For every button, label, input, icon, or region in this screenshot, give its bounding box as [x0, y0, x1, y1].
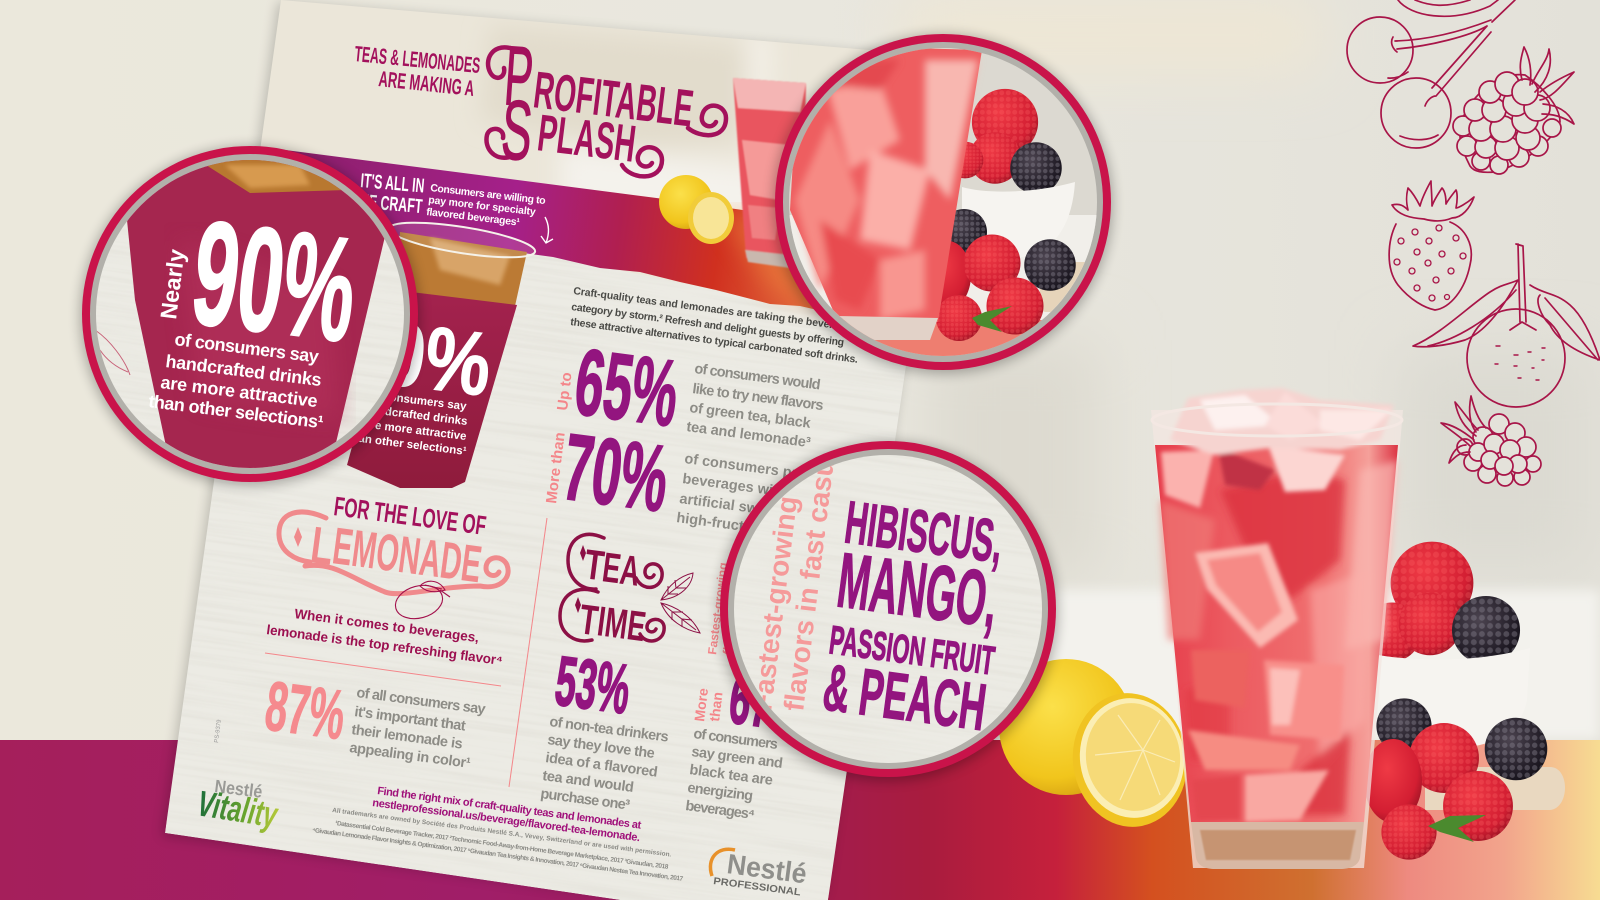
- title: Profitable Splash: [486, 28, 726, 178]
- icon: raspberry: [1453, 47, 1574, 174]
- band text: pay more for specialty: [428, 194, 536, 218]
- magnified flavour list: HIBISCUS,: [841, 488, 1007, 576]
- heading: For the love of lemonade: EMONADE: [329, 517, 485, 594]
- stat: 67%: than: [706, 691, 726, 722]
- stat: 70%: artificial sweeteners or: [678, 491, 837, 528]
- stat: fastest-growing flavours side label (small): flavors in fast casual: [720, 536, 748, 655]
- band text: flavored beverages¹: [426, 206, 521, 229]
- magnified side label: Fastest-growing: [746, 494, 803, 713]
- heading: Tea Time: [560, 534, 664, 650]
- body paragraph: these attractive alternatives to typical carbonated soft drinks.: [570, 316, 859, 366]
- stat: 67%: 67%: [725, 660, 811, 747]
- body paragraph: [570, 285, 859, 366]
- stat: 70%: high-fructose corn syrup: [675, 510, 848, 548]
- stat: 87%: [261, 667, 486, 772]
- heading: Tea Time: T: [582, 540, 607, 589]
- stat: fastest-growing flavours side label (small): Fastest-growing: [705, 562, 730, 655]
- stat: 70%: [543, 414, 848, 548]
- stat: 70%: More than: [543, 431, 569, 504]
- band heading: It's all in the craft: [352, 170, 425, 218]
- stat: fastest-growing flavours side label (small): [705, 536, 748, 655]
- icon: orange with leaves: [1413, 244, 1600, 407]
- icon: small raspberry: [1441, 396, 1541, 486]
- stat: 53%: tea and would: [541, 768, 635, 796]
- small glass photo: [733, 78, 806, 268]
- stat: 65%: of consumers would: [693, 361, 821, 394]
- stat: 87%: 87%: [261, 667, 350, 754]
- stat: 53%: say they love the: [546, 732, 656, 762]
- cup photo with 90% stat: 90%: [338, 299, 497, 416]
- footnotes: All trademarks are owned by Société des Produits Nestlé S.A., Vevey, Switzerland or are used with permission.: [332, 807, 672, 859]
- magnified flavour list: [824, 500, 1000, 731]
- title: Profitable Splash: PLASH: [535, 104, 639, 174]
- stat: 67%: say green and: [690, 744, 784, 772]
- body paragraph: Craft-quality teas and lemonades are taking the beverage: [573, 285, 852, 334]
- cup photo with 90% stat: handcrafted drinks: [364, 403, 468, 428]
- band text: Consumers are willing to: [430, 182, 546, 207]
- heading: For the love of lemonade: FOR THE LOVE OF: [332, 491, 488, 541]
- text: title kicker: ARE MAKING A: [377, 66, 476, 101]
- divider: [265, 653, 501, 686]
- arrow: band pointing to cup: [541, 217, 553, 243]
- title: Profitable Splash: S: [499, 82, 535, 178]
- band heading: It's all in the craft: THE CRAFT: [352, 190, 423, 218]
- stat: 67%: of consumers: [692, 726, 779, 753]
- stat: 67%: More: [691, 687, 711, 722]
- magnified stat text: than other selections¹: [148, 391, 325, 432]
- logo: Nestlé Professional: Nestlé: [725, 848, 809, 889]
- heading: Tea Time: T: [577, 595, 601, 644]
- heading: Tea Time: EA: [600, 543, 643, 595]
- stat: 53%: 53%: [551, 642, 635, 729]
- magnified flavour list: & PEACH: [819, 650, 990, 744]
- magnified 90%: 90%: [184, 190, 365, 374]
- cup photo with 90% stat: [338, 216, 537, 488]
- text: title kicker: [354, 41, 481, 101]
- heading: For the love of lemonade: L: [307, 516, 337, 577]
- stat: 87%: it's important that: [353, 704, 467, 735]
- cup photo with 90% stat: of consumers say: [369, 389, 468, 413]
- call to action link: Find the right mix of craft-quality teas and lemonades at: [377, 785, 642, 832]
- stat: 65%: tea and lemonade³: [685, 419, 812, 451]
- subhead: lemonade top flavor: lemonade is the top refreshing flavor⁴: [266, 622, 504, 668]
- logo: Nestlé Vitality: Nestlé: [214, 776, 264, 802]
- sheet lower: white wood panel: [165, 256, 906, 900]
- magnified side label: flavors in fast casual: [778, 434, 843, 713]
- stat: 67%: black tea are: [688, 762, 774, 789]
- stat: 87%: their lemonade is: [350, 722, 464, 753]
- cup photo with 90% stat: are more attractive: [363, 419, 467, 443]
- heading: For the love of lemonade: [279, 491, 508, 594]
- logo: Nestlé Professional: [710, 848, 809, 898]
- stat: 67%: energizing: [686, 780, 754, 805]
- magnified stat text: are more attractive: [160, 372, 319, 411]
- panel: infographic sheet: [160, 0, 960, 900]
- footnotes: ¹Datassential Cold Beverage Tracker, 2017 ²Technomic Food-Away-from-Home Beverage Marketplace, 2017 ³Givaudan, 2018: [335, 820, 669, 871]
- logo: Nestlé Vitality: [195, 776, 282, 836]
- magnified flavour list: MANGO,: [833, 536, 1003, 644]
- stat: 65%: of green tea, black: [688, 400, 812, 432]
- photo: large glass of iced tea: [1151, 388, 1403, 869]
- stat: 67%: beverages⁴: [684, 798, 756, 823]
- magnified stat text: of consumers say: [174, 329, 320, 367]
- logo: Nestlé Vitality: Vitality: [195, 782, 282, 836]
- stat: 53%: of non-tea drinkers: [548, 714, 670, 746]
- band text: [426, 182, 546, 229]
- divider: [509, 518, 547, 787]
- stat: 53%: idea of a flavored: [544, 750, 659, 781]
- small lemons: [659, 175, 734, 244]
- magnified Nearly label: Nearly: [155, 247, 190, 321]
- heading: Tea Time: IME: [595, 597, 649, 650]
- band heading: It's all in the craft: IT'S ALL IN: [360, 170, 425, 198]
- stat: 70%: of consumers prefer: [683, 451, 825, 485]
- stat: 65%: Up to: [554, 371, 576, 411]
- colour band with torn edge: [286, 150, 814, 310]
- floor colour band: [0, 740, 1600, 900]
- icon: cherries and leaf: [1347, 0, 1515, 148]
- photo: lemons: [999, 659, 1196, 834]
- cup photo with 90% stat: than other selections¹: [347, 432, 467, 458]
- stat: 67%: [684, 660, 811, 823]
- magnified flavour list: PASSION FRUIT: [827, 618, 997, 684]
- stat: 53%: [539, 642, 670, 814]
- magnified stat text: [149, 334, 323, 428]
- title: Profitable Splash: P: [502, 28, 536, 124]
- subhead: lemonade top flavor: When it comes to beverages,: [294, 606, 480, 645]
- sheet top: blurred photo backdrop: [260, 0, 870, 290]
- stat: 70%: 70%: [557, 414, 674, 531]
- photo: bowl of berries: [1363, 542, 1565, 860]
- job code: PS-9379: [214, 719, 223, 743]
- body paragraph: category by storm.² Refresh and delight guests by offering: [571, 301, 845, 349]
- stat: 53%: purchase one³: [539, 786, 631, 814]
- stat: 70%: beverages with no: [681, 471, 809, 503]
- icon: strawberry: [1389, 181, 1474, 310]
- magnifier: flavours: [718, 434, 1058, 781]
- call to action link: nestleprofessional.us/beverage/flavored-tea-lemonade.: [372, 797, 641, 844]
- icon: lemon outline: [392, 580, 450, 624]
- stat: 65%: 65%: [569, 329, 684, 446]
- magnified side label: [759, 465, 834, 710]
- stat: 87%: appealing in color¹: [348, 740, 472, 772]
- stat: 87%: of all consumers say: [355, 685, 486, 718]
- magnifier: drink and berries: [773, 34, 1113, 374]
- stat: 65%: like to try new flavors: [691, 381, 824, 414]
- title: Profitable Splash: ROFITABLE: [531, 61, 696, 138]
- magnified stat text: handcrafted drinks: [165, 351, 323, 390]
- logo: Nestlé Professional: PROFESSIONAL: [713, 876, 801, 898]
- icon: tea leaves: [661, 573, 700, 633]
- text: title kicker: TEAS & LEMONADES: [354, 41, 481, 78]
- footnotes: ⁴Givaudan Lemonade Flavor Insights & Optimization, 2017 ⁵Givaudan Tea Insights & Innovation, 2017 ⁶Givaudan Nestea Tea Innovation, 2017: [312, 827, 684, 883]
- magnifier: 90% stat: [80, 146, 420, 486]
